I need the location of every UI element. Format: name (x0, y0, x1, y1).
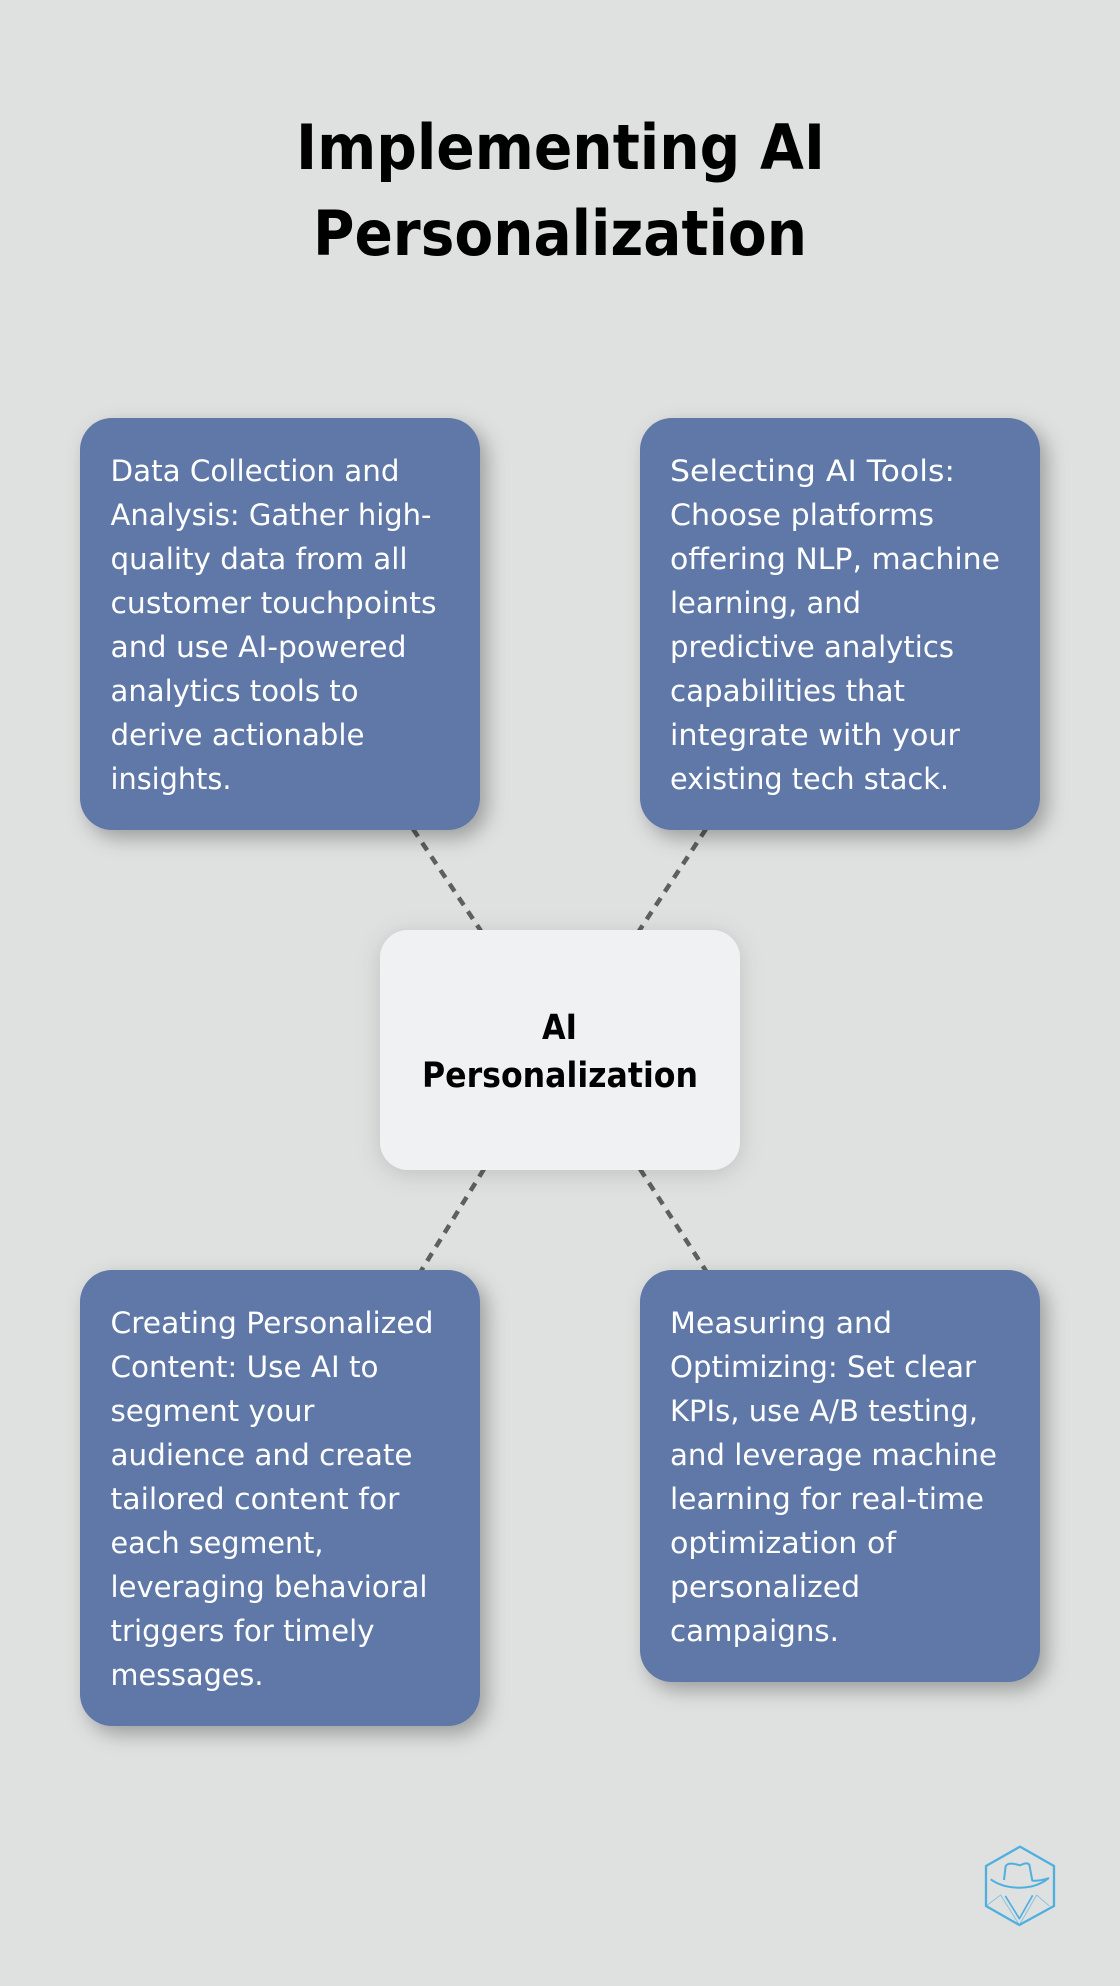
text: selecting AI tools: Choose platforms (670, 498, 934, 532)
text: selecting AI tools: Selecting AI Tools: (670, 454, 955, 488)
text: creating personalized content: leveraging behavioral (110, 1570, 428, 1604)
text: measuring and optimizing: KPIs, use A/B testing, (670, 1394, 978, 1428)
text: data collection and analysis: insights. (110, 762, 232, 796)
text: data collection and analysis: Data Collection and (110, 454, 400, 488)
text: selecting AI tools: existing tech stack. (670, 762, 949, 796)
text: data collection and analysis: and use AI-powered (110, 630, 406, 664)
text: creating personalized content: triggers for timely (110, 1614, 374, 1648)
panel: selecting AI tools (640, 418, 1040, 830)
text: measuring and optimizing: and leverage machine (670, 1438, 997, 1472)
text: measuring and optimizing: Optimizing: Set clear (670, 1350, 976, 1384)
title: Implementing AI (296, 111, 825, 184)
text: measuring and optimizing: learning for real-time (670, 1482, 984, 1516)
text: creating personalized content: segment your (110, 1394, 315, 1428)
text: selecting AI tools: capabilities that (670, 674, 905, 708)
text: creating personalized content: tailored content for (110, 1482, 400, 1516)
text: measuring and optimizing: personalized (670, 1570, 860, 1604)
text: creating personalized content: audience and create (110, 1438, 412, 1472)
text: selecting AI tools: offering NLP, machine (670, 542, 1000, 576)
panel: measuring and optimizing (640, 1270, 1040, 1682)
text: data collection and analysis: Analysis: Gather high- (110, 498, 432, 532)
panel: data collection and analysis (80, 418, 480, 830)
icon: hexagon spy logo (986, 1847, 1054, 1925)
text: measuring and optimizing (670, 1306, 997, 1648)
center label (422, 1008, 698, 1096)
text: measuring and optimizing: campaigns. (670, 1614, 839, 1648)
text: data collection and analysis: quality data from all (110, 542, 408, 576)
text: selecting AI tools (670, 454, 1000, 796)
text: data collection and analysis (110, 454, 436, 796)
text: creating personalized content: each segment, (110, 1526, 324, 1560)
text: creating personalized content: Creating Personalized (110, 1306, 433, 1340)
text: selecting AI tools: integrate with your (670, 718, 960, 752)
text: selecting AI tools: predictive analytics (670, 630, 954, 664)
text: data collection and analysis: customer touchpoints (110, 586, 436, 620)
panel: center AI personalization (380, 930, 740, 1170)
panel: creating personalized content (80, 1270, 480, 1726)
center label: AI (542, 1008, 577, 1048)
dashed connectors (413, 829, 706, 1271)
text: selecting AI tools: learning, and (670, 586, 861, 620)
text: measuring and optimizing: Measuring and (670, 1306, 892, 1340)
center label: Personalization (422, 1056, 698, 1096)
title (296, 111, 825, 270)
text: creating personalized content (110, 1306, 433, 1692)
text: creating personalized content: messages. (110, 1658, 264, 1692)
text: data collection and analysis: derive actionable (110, 718, 364, 752)
text: measuring and optimizing: optimization of (670, 1526, 897, 1560)
title: Personalization (313, 197, 807, 270)
text: data collection and analysis: analytics tools to (110, 674, 358, 708)
text: creating personalized content: Content: Use AI to (110, 1350, 378, 1384)
